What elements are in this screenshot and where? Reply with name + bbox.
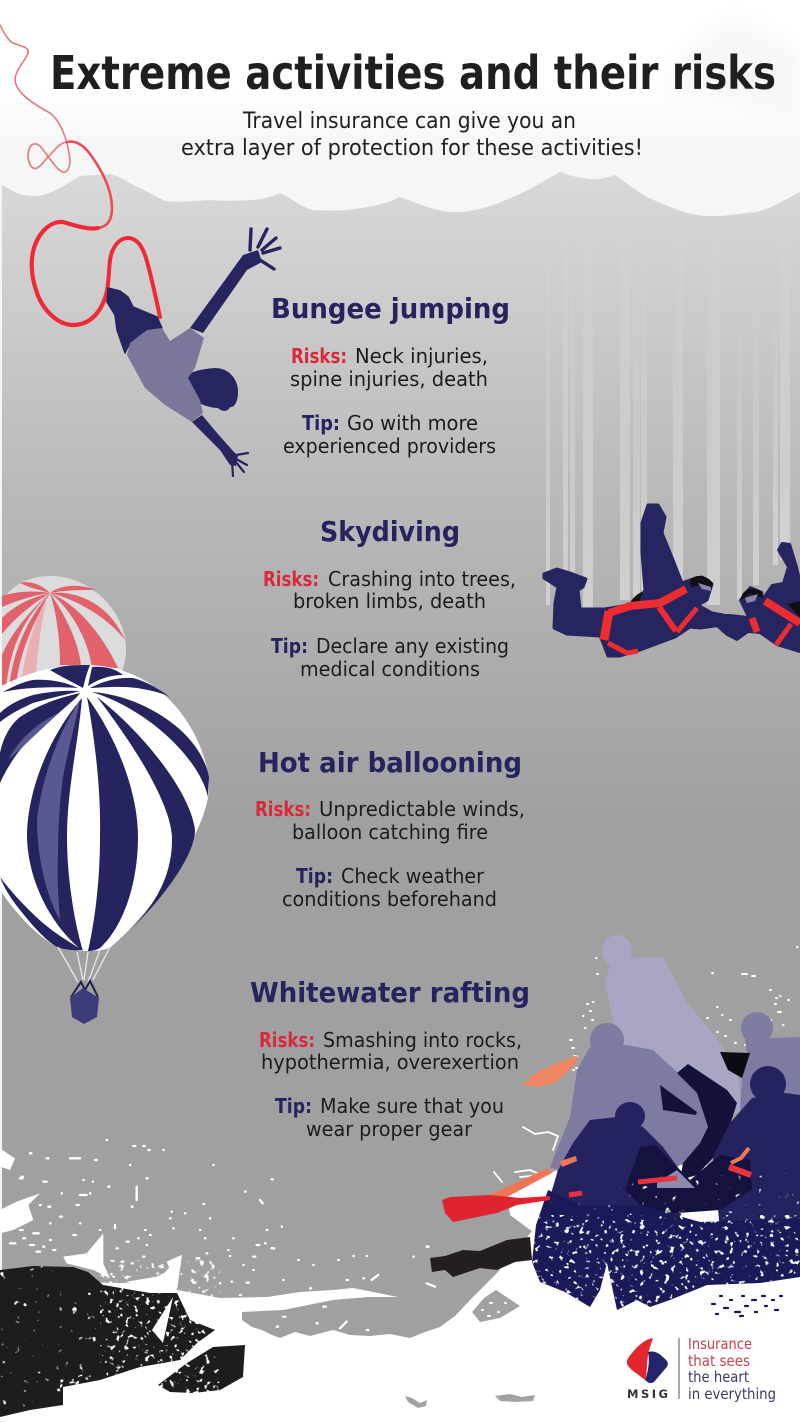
logo tagline: in everything [688, 1385, 776, 1403]
bungee jumping text: Risks: [291, 344, 347, 368]
bungee jumping text: Go with more [347, 411, 478, 435]
logo divider [678, 1338, 680, 1399]
whitewater rafting text: wear proper gear [306, 1117, 473, 1141]
balloon ropes [58, 947, 110, 982]
skydiving text: Declare any existing [316, 634, 509, 658]
heading: whitewater rafting: Whitewater rafting [250, 976, 530, 1009]
cloud header [0, 0, 800, 216]
heading: skydiving: Skydiving [320, 515, 460, 548]
rafter front right [713, 1066, 800, 1230]
logo tagline: that sees [688, 1352, 750, 1370]
skydiving text: medical conditions [300, 657, 480, 681]
heading: hot air ballooning: Hot air ballooning [258, 746, 522, 779]
hot air ballooning text [255, 797, 525, 911]
left margin strip [0, 170, 2, 1270]
hot air ballooning text: conditions beforehand [282, 887, 497, 911]
bottom-left black rocks [0, 1260, 250, 1420]
rafter front left [550, 1102, 687, 1225]
whitewater rafting text [259, 1028, 522, 1141]
whitewater rafting text: hypothermia, overexertion [261, 1050, 519, 1074]
logo wordmark: MSIG [627, 1387, 668, 1401]
pink background balloon [2, 576, 126, 690]
skydiving text [263, 567, 516, 681]
logo tagline: the heart [688, 1368, 749, 1386]
bungee jumping text: experienced providers [283, 434, 496, 458]
MSIG logo [627, 1335, 776, 1403]
bungee jumping text: spine injuries, death [290, 367, 488, 391]
subtitle: extra layer of protection for these activities! [181, 136, 643, 161]
skydiving text: Tip: [271, 634, 308, 658]
rafter back right [740, 1012, 800, 1112]
bungee jumping text [283, 344, 496, 458]
white water and foam [0, 1127, 800, 1422]
heading: bungee jumping: Bungee jumping [271, 292, 510, 325]
bungee jumping text: Neck injuries, [355, 344, 488, 368]
hot air ballooning text: Risks: [255, 797, 311, 821]
skydiving text: Risks: [263, 567, 319, 591]
bungee rope [0, 25, 160, 325]
skydiving text: broken limbs, death [293, 589, 486, 613]
rafter leg dark [660, 1064, 737, 1180]
hot air ballooning text: Tip: [296, 864, 333, 888]
raft red straps [569, 1148, 751, 1195]
skydiving text: Crashing into trees, [328, 567, 516, 591]
skydiver two [718, 543, 800, 652]
skydiving speed streaks [546, 205, 790, 610]
whitewater rafting text: Risks: [259, 1028, 315, 1052]
orange paddle shaft [490, 1156, 577, 1197]
black raft details [720, 1052, 750, 1078]
whitewater rafting text: Smashing into rocks, [323, 1028, 522, 1052]
bungee jumping text: Tip: [302, 411, 340, 435]
subtitle [181, 109, 643, 161]
hot air ballooning text: balloon catching fire [292, 820, 488, 844]
hot air ballooning text: Check weather [341, 864, 485, 888]
rafter back top [602, 935, 742, 1130]
logo tagline: Insurance [688, 1335, 752, 1353]
red paddle [442, 1195, 550, 1222]
raft hull [530, 1145, 800, 1316]
navy hot air balloon [0, 665, 209, 951]
mid black rock [430, 1237, 532, 1277]
skydiver one [544, 505, 723, 656]
whitewater rafting text: Tip: [275, 1094, 312, 1118]
spray around raft [570, 947, 798, 1070]
hot air ballooning text: Unpredictable winds, [319, 797, 525, 821]
logo tagline [688, 1335, 776, 1403]
subtitle: Travel insurance can give you an [242, 109, 576, 134]
raft paddle orange upper [522, 1055, 577, 1087]
rafter middle left [550, 1023, 708, 1185]
balloon basket [70, 981, 99, 1024]
whitewater rafting text: Make sure that you [320, 1094, 504, 1118]
bungee jumper [107, 229, 280, 476]
logo mark [627, 1338, 668, 1383]
